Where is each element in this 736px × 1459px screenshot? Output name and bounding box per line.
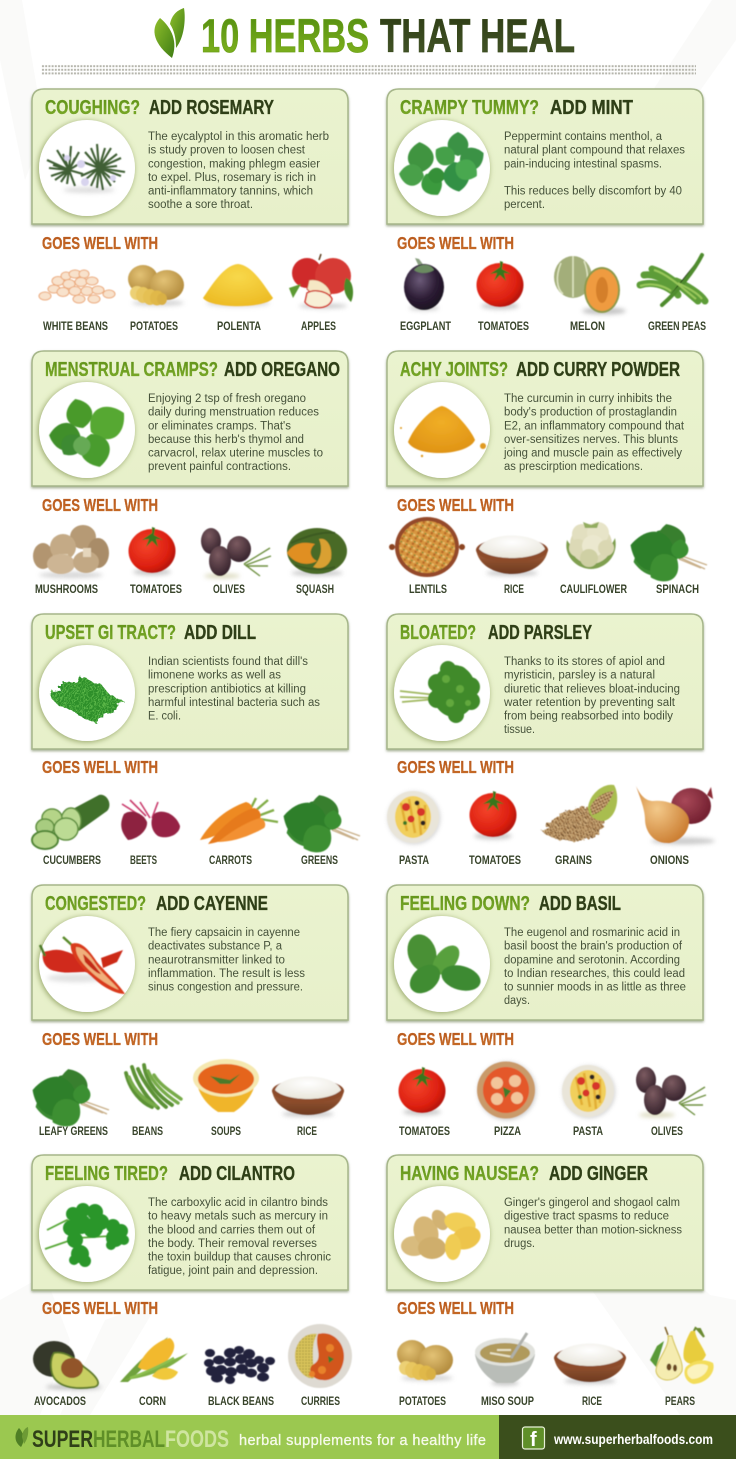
subheading: GOES WELL WITH: [42, 1298, 158, 1318]
body text: inflammation. The result is less: [148, 968, 305, 980]
food: mushrooms: MUSHROOMS: [35, 582, 98, 596]
food: pasta: PASTA: [399, 853, 429, 867]
title: [154, 8, 575, 63]
food: tomatoes: TOMATOES: [478, 319, 529, 333]
herb circle: parsley: [394, 645, 490, 741]
food: cauliflower: CAULIFLOWER: [560, 582, 627, 596]
icon: facebook: f: [530, 1429, 537, 1451]
panel: dill: [32, 614, 348, 749]
body text: the body. Their removal reverses: [148, 1238, 317, 1250]
body text: the toxin buildup that causes chronic: [148, 1252, 331, 1264]
herb circle: curry powder: [394, 382, 490, 478]
body text: [148, 927, 305, 994]
body text: over-sensitizes nerves. This blunts: [504, 434, 678, 446]
heading: ADD BASIL: [539, 892, 621, 915]
food: rice: RICE: [297, 1124, 317, 1138]
herb circle: dill: [39, 645, 135, 741]
food: potatoes: POTATOES: [130, 319, 178, 333]
body text: because this herb's thymol and: [148, 434, 304, 446]
footer bar: [0, 1415, 736, 1459]
food: cucumbers: CUCUMBERS: [43, 853, 101, 867]
food: squash: SQUASH: [296, 582, 334, 596]
herb circle: cilantro: [39, 1186, 135, 1282]
herb circle: rosemary: [39, 120, 135, 216]
body text: fatigue, joint pain and depression.: [148, 1265, 318, 1277]
food: eggplant: [400, 258, 452, 333]
food: leafy greens: [27, 1065, 109, 1138]
body text: joing and muscle pain as effectively: [503, 448, 682, 460]
food: rice: RICE: [582, 1394, 602, 1408]
body text: Peppermint contains menthol, a: [504, 131, 663, 143]
heading: [45, 96, 274, 119]
food: squash: [287, 528, 347, 596]
body text: daily during menstruation reduces: [148, 407, 319, 419]
food: beets: BEETS: [130, 853, 157, 867]
herb circle: cayenne: [39, 916, 135, 1012]
heading: ADD CAYENNE: [156, 892, 268, 915]
heading: COUGHING?: [45, 96, 140, 119]
food: miso soup: [475, 1333, 535, 1408]
heading: ADD PARSLEY: [488, 621, 592, 644]
body text: Thanks to its stores of apiol and: [504, 656, 665, 668]
body text: nausea better than motion-sickness: [504, 1224, 682, 1236]
food: tomatoes: [469, 791, 521, 867]
body text: natural plant compound that relaxes: [504, 145, 685, 157]
body text: tissue.: [504, 724, 535, 736]
heading: ADD DILL: [184, 621, 256, 644]
food: pasta: PASTA: [573, 1124, 603, 1138]
heading: ADD CILANTRO: [179, 1162, 295, 1185]
body text: E. coli.: [148, 711, 181, 723]
body text: The carboxylic acid in cilantro binds: [148, 1197, 328, 1209]
food: cucumbers: [32, 795, 109, 867]
body text: sinus congestion and pressure.: [148, 982, 303, 994]
food: spinach: [625, 520, 707, 596]
body text: [148, 131, 329, 211]
body text: from being reabsorbed into bodily: [504, 711, 673, 723]
herb circle: basil: [394, 916, 490, 1012]
heading: [45, 1162, 295, 1185]
icon: footer leaf: [15, 1427, 28, 1447]
food: carrots: CARROTS: [209, 853, 252, 867]
food: grains: GRAINS: [555, 853, 592, 867]
heading: ADD CURRY POWDER: [516, 358, 680, 381]
food: avocados: AVOCADOS: [34, 1394, 86, 1408]
food: corn: CORN: [139, 1394, 166, 1408]
food: potatoes: [128, 265, 184, 333]
food: lentils: [389, 517, 465, 596]
body text: The fiery capsaicin in cayenne: [148, 927, 300, 939]
body text: pain-inducing intestinal spasms.: [504, 158, 662, 170]
section: parsley pairings: [387, 757, 715, 867]
body text: congestion, making phlegm easier: [148, 158, 320, 170]
body text: E2, an inflammatory compound that: [504, 420, 685, 432]
subheading: GOES WELL WITH: [397, 757, 514, 777]
food: olives: OLIVES: [213, 582, 245, 596]
food: rice: [554, 1344, 626, 1408]
subheading: GOES WELL WITH: [42, 757, 158, 777]
body text: [504, 1197, 682, 1250]
food: soups: [193, 1059, 259, 1138]
body text: as prescirption medications.: [504, 461, 643, 473]
food: rice: [272, 1076, 344, 1138]
body text: to expel. Plus, rosemary is rich in: [148, 172, 316, 184]
food: tomatoes: [128, 527, 182, 596]
section: dill pairings: [32, 757, 360, 867]
food: pasta: [387, 791, 440, 867]
food: soups: SOUPS: [211, 1124, 241, 1138]
food: pizza: [477, 1062, 536, 1138]
body text: [503, 656, 680, 736]
subheading: GOES WELL WITH: [397, 233, 514, 253]
food: beans: BEANS: [132, 1124, 163, 1138]
body text: to Indian researches, this could lead: [504, 968, 685, 980]
food: carrots: [200, 798, 278, 867]
body text: carvacrol, relax uterine muscles to: [148, 448, 323, 460]
herb circle: mint: [394, 120, 490, 216]
heading: ADD MINT: [550, 96, 633, 119]
body text: soothe a sore throat.: [148, 199, 253, 211]
food: spinach: SPINACH: [656, 582, 699, 596]
herb circle: ginger: [394, 1186, 490, 1282]
food: cauliflower: [560, 522, 627, 596]
icon: leaf logo: [154, 8, 185, 58]
heading: [400, 358, 680, 381]
food: grains: [542, 785, 617, 867]
food: greens: GREENS: [301, 853, 338, 867]
brand logo: HERBAL: [93, 1426, 165, 1453]
food: corn: [120, 1337, 188, 1408]
body text: prevent painful contractions.: [148, 461, 291, 473]
panel: cilantro: [32, 1155, 348, 1290]
body text: or eliminates cramps. That's: [148, 420, 291, 432]
body text: to heavy metals such as mercury in: [148, 1211, 328, 1223]
body text: diuretic that relieves bloat-inducing: [504, 683, 680, 695]
body text: drugs.: [504, 1238, 535, 1250]
body text: [504, 927, 686, 1007]
body text: days.: [504, 995, 530, 1007]
section: curry pairings: [389, 495, 707, 596]
panel: parsley: [387, 614, 703, 749]
food: onions: ONIONS: [650, 853, 689, 867]
food: curries: [288, 1324, 352, 1408]
body text: neaurotransmitter linked to: [148, 954, 285, 966]
body text: [148, 1197, 331, 1277]
food: pizza: PIZZA: [494, 1124, 521, 1138]
body text: is study proven to loosen chest: [148, 145, 306, 157]
food: onions: [636, 786, 715, 867]
brand logo: SUPER: [32, 1426, 93, 1453]
food: greens: [278, 791, 360, 867]
section: rosemary pairings: [39, 233, 353, 333]
heading: ACHY JOINTS?: [400, 358, 508, 381]
food: avocados: [33, 1341, 102, 1408]
brand logo: FOODS: [165, 1426, 229, 1453]
section: cilantro pairings: [33, 1298, 352, 1408]
food: olives: [636, 1067, 706, 1138]
food: tomatoes: TOMATOES: [130, 582, 182, 596]
food: tomatoes: [398, 1067, 450, 1138]
heading: ADD ROSEMARY: [149, 96, 274, 119]
body text: limonene works as well as: [148, 670, 281, 682]
panel: curry powder: [387, 351, 703, 486]
food: tomatoes: TOMATOES: [399, 1124, 450, 1138]
body text: This reduces belly discomfort by 40: [504, 186, 682, 198]
panel: mint: [387, 89, 703, 224]
panel: ginger: [387, 1155, 703, 1290]
body text: to sunnier moods in as little as three: [504, 982, 686, 994]
food: apples: APPLES: [301, 319, 336, 333]
body text: dopamine and serotonin. According: [504, 954, 680, 966]
food: rice: RICE: [504, 582, 524, 596]
food: pears: PEARS: [665, 1394, 695, 1408]
food: melon: [554, 256, 626, 333]
body text: [504, 131, 685, 211]
title text green: 10 HERBS: [201, 10, 369, 63]
food: beets: [121, 800, 180, 867]
food: leafy greens: LEAFY GREENS: [39, 1124, 108, 1138]
food: melon: MELON: [570, 319, 605, 333]
body text: Enjoying 2 tsp of fresh oregano: [148, 393, 306, 405]
body text: Indian scientists found that dill's: [148, 656, 308, 668]
subheading: GOES WELL WITH: [42, 495, 158, 515]
herb circle: oregano: [39, 382, 135, 478]
section: oregano pairings: [33, 495, 347, 596]
food: pears: [650, 1327, 714, 1408]
food: eggplant: EGGPLANT: [400, 319, 452, 333]
heading: CRAMPY TUMMY?: [400, 96, 539, 119]
panel: oregano: [32, 351, 348, 486]
heading: MENSTRUAL CRAMPS?: [45, 358, 218, 381]
body text: harmful intestinal bacteria such as: [148, 697, 320, 709]
heading: [400, 621, 592, 644]
brand logo: [32, 1426, 229, 1453]
food: apples: [289, 254, 353, 333]
food: lentils: LENTILS: [409, 582, 447, 596]
food: mushrooms: [33, 525, 109, 596]
body text: myristicin, parsley is a natural: [504, 670, 655, 682]
subheading: GOES WELL WITH: [397, 495, 514, 515]
food: potatoes: [397, 1340, 453, 1408]
food: white beans: WHITE BEANS: [43, 319, 108, 333]
heading: ADD GINGER: [549, 1162, 648, 1185]
body text: [148, 656, 320, 723]
food: polenta: [203, 264, 273, 333]
body text: The eugenol and rosmarinic acid in: [504, 927, 680, 939]
food: tomatoes: TOMATOES: [469, 853, 521, 867]
subheading: GOES WELL WITH: [42, 1029, 158, 1049]
body text: anti-inflammatory tannins, which: [148, 186, 313, 198]
body text: [503, 393, 685, 473]
body text: digestive tract spasms to reduce: [504, 1211, 669, 1223]
heading: [45, 892, 268, 915]
heading: ADD OREGANO: [224, 358, 340, 381]
body text: The curcumin in curry inhibits the: [504, 393, 672, 405]
body text: prescription antibiotics at killing: [148, 683, 306, 695]
food: black beans: BLACK BEANS: [208, 1394, 274, 1408]
food: pasta: [562, 1065, 615, 1138]
food: rice: [476, 536, 548, 596]
section: cayenne pairings: [27, 1029, 344, 1138]
subheading: GOES WELL WITH: [397, 1298, 514, 1318]
panel: basil: [387, 885, 703, 1020]
tagline: herbal supplements for a healthy life: [239, 1433, 486, 1449]
food: black beans: [204, 1346, 275, 1408]
food: polenta: POLENTA: [217, 319, 261, 333]
heading: HAVING NAUSEA?: [400, 1162, 539, 1185]
body text: basil boost the brain's production of: [504, 941, 683, 953]
website url: www.superherbalfoods.com: [553, 1431, 713, 1447]
body text: the blood and carries them out of: [148, 1224, 316, 1236]
body text: water retention by preventing salt: [503, 697, 676, 709]
food: miso soup: MISO SOUP: [481, 1394, 534, 1408]
food: tomatoes: [476, 261, 529, 333]
section: ginger pairings: [397, 1298, 714, 1408]
heading: FEELING TIRED?: [45, 1162, 168, 1185]
food: green peas: GREEN PEAS: [648, 319, 706, 333]
food: curries: CURRIES: [301, 1394, 340, 1408]
food: olives: [201, 528, 271, 596]
heading: UPSET GI TRACT?: [45, 621, 176, 644]
subheading: GOES WELL WITH: [42, 233, 158, 253]
panel: cayenne: [32, 885, 348, 1020]
subheading: GOES WELL WITH: [397, 1029, 514, 1049]
food: beans: [126, 1065, 181, 1138]
food: potatoes: POTATOES: [399, 1394, 446, 1408]
heading: FEELING DOWN?: [400, 892, 530, 915]
body text: Ginger's gingerol and shogaol calm: [504, 1197, 680, 1209]
section: basil pairings: [397, 1029, 706, 1138]
body text: percent.: [504, 199, 545, 211]
body text: The eycalyptol in this aromatic herb: [148, 131, 329, 143]
title text dark: THAT HEAL: [380, 10, 575, 63]
food: green peas: [640, 255, 706, 333]
body text: deactivates substance P, a: [148, 941, 283, 953]
heading: BLOATED?: [400, 621, 476, 644]
food: olives: OLIVES: [651, 1124, 683, 1138]
section: mint pairings: [397, 233, 706, 333]
panel: rosemary: [32, 89, 348, 224]
food: white beans: [39, 270, 115, 333]
heading: CONGESTED?: [45, 892, 146, 915]
body text: body's production of prostaglandin: [504, 407, 677, 419]
body text: [148, 393, 323, 473]
icon: facebook: [522, 1427, 544, 1451]
